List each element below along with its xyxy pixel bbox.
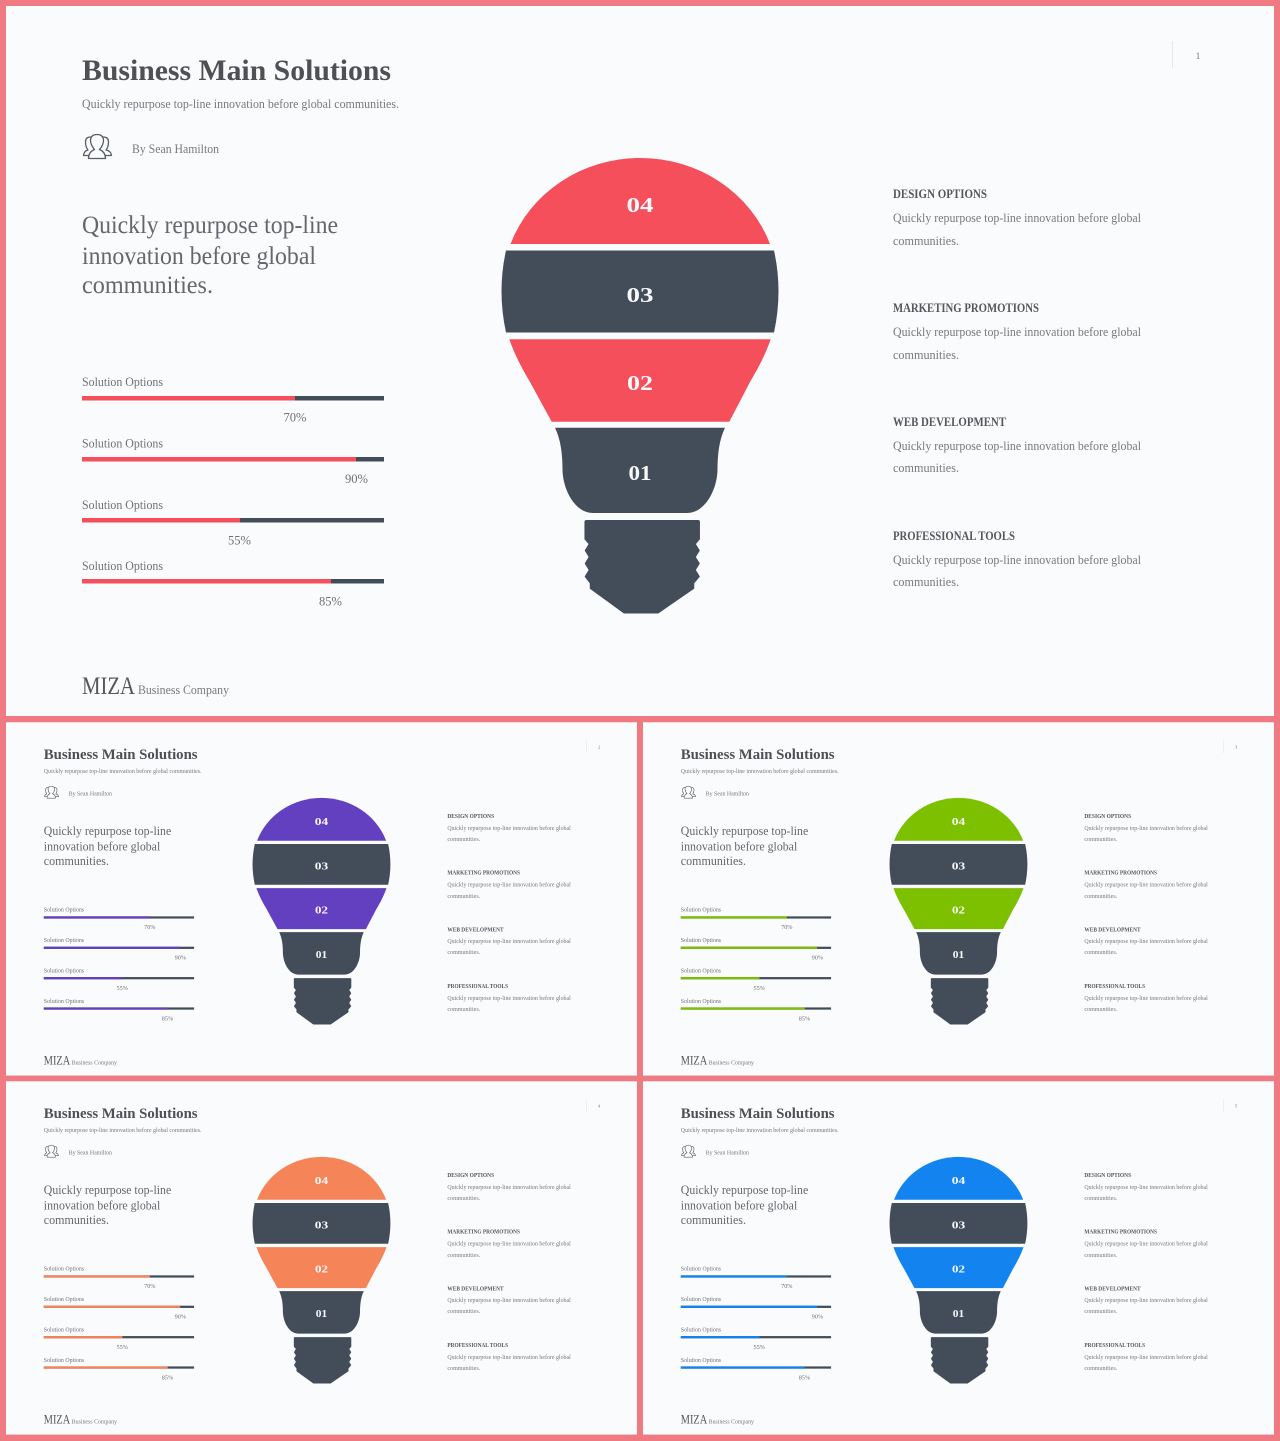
solutions list: Quickly repurpose top-line innovation before global (1084, 995, 1208, 1002)
solutions list: Quickly repurpose top-line innovation before global (447, 1297, 571, 1304)
solutions list: communities. (1084, 1308, 1118, 1315)
solutions list: Quickly repurpose top-line innovation before global (893, 324, 1141, 339)
light bulb: 04 (315, 817, 329, 828)
subtitle: Quickly repurpose top-line innovation before global communities. (44, 1127, 202, 1134)
title: Business Main Solutions (681, 747, 835, 763)
light bulb: 01 (316, 950, 327, 961)
progress bars: 85% (799, 1016, 811, 1023)
solutions list: communities. (1084, 893, 1118, 900)
progress bars: 70% (144, 924, 156, 931)
progress bars: 70% (781, 1283, 793, 1290)
author: By Sean Hamilton (69, 1149, 113, 1156)
footer brand (681, 1054, 755, 1068)
solutions list: PROFESSIONAL TOOLS (893, 529, 1015, 543)
light bulb: 02 (952, 905, 965, 916)
solutions list: communities. (447, 949, 481, 956)
solutions list: communities. (893, 233, 959, 248)
author: By Sean Hamilton (706, 1149, 750, 1156)
progress bars (82, 374, 384, 608)
progress bars (44, 1265, 194, 1382)
solutions list: communities. (1084, 836, 1118, 843)
solutions list: DESIGN OPTIONS (447, 813, 495, 820)
solutions list (893, 187, 1141, 589)
progress bars (44, 906, 194, 1023)
light bulb: 03 (952, 1221, 965, 1232)
progress bars: Solution Options (82, 497, 163, 512)
footer brand: MIZA (681, 1054, 707, 1068)
solutions list: communities. (893, 347, 959, 362)
solutions list: WEB DEVELOPMENT (447, 926, 504, 933)
panel: red slide (6, 6, 1274, 716)
light bulb (502, 158, 778, 613)
footer brand: MIZA (681, 1413, 707, 1427)
light bulb: 03 (315, 1221, 328, 1232)
page number: 5 (1235, 1104, 1238, 1109)
progress bars: Solution Options (44, 906, 85, 913)
footer brand: Business Company (72, 1060, 118, 1067)
solutions list (447, 813, 571, 1013)
lead text: innovation before global (44, 840, 161, 854)
lead text (44, 824, 172, 868)
solutions list: Quickly repurpose top-line innovation before global (1084, 1297, 1208, 1304)
solutions list: MARKETING PROMOTIONS (1084, 1229, 1157, 1236)
solutions list (1084, 1172, 1208, 1372)
progress bars: Solution Options (44, 998, 85, 1005)
progress bars: Solution Options (44, 1296, 85, 1303)
author: By Sean Hamilton (706, 790, 750, 797)
page number: 1 (1196, 51, 1200, 61)
solutions list: WEB DEVELOPMENT (1084, 926, 1141, 933)
light bulb: 04 (952, 1176, 966, 1187)
progress bars: 90% (345, 471, 368, 486)
progress bars: 70% (781, 924, 793, 931)
progress bars: 85% (162, 1016, 174, 1023)
solutions list: Quickly repurpose top-line innovation before global (893, 552, 1141, 567)
lead text: communities. (44, 854, 109, 868)
solutions list: Quickly repurpose top-line innovation before global (447, 1184, 571, 1191)
footer brand: MIZA (44, 1413, 70, 1427)
progress bars: 55% (753, 985, 765, 992)
solutions list: Quickly repurpose top-line innovation before global (893, 210, 1141, 225)
lead text: communities. (82, 272, 213, 299)
page number (586, 740, 600, 753)
lead text: Quickly repurpose top-line (44, 824, 172, 838)
icon: people (45, 1145, 58, 1157)
progress bars: 85% (319, 594, 342, 608)
light bulb (253, 798, 390, 1024)
light bulb: 02 (952, 1264, 965, 1275)
light bulb: 04 (626, 193, 654, 217)
progress bars: Solution Options (681, 998, 722, 1005)
solutions list: PROFESSIONAL TOOLS (447, 1342, 509, 1349)
solutions list: Quickly repurpose top-line innovation before global (1084, 938, 1208, 945)
footer brand (44, 1413, 118, 1427)
progress bars: Solution Options (44, 1265, 85, 1272)
solutions list: communities. (893, 574, 959, 589)
light bulb (890, 798, 1027, 1024)
light bulb: 01 (628, 461, 652, 485)
progress bars: 55% (116, 1344, 128, 1351)
solutions list: communities. (447, 1308, 481, 1315)
progress bars: 70% (284, 410, 307, 424)
solutions list: PROFESSIONAL TOOLS (1084, 983, 1146, 990)
solutions list: communities. (1084, 949, 1118, 956)
solutions list: Quickly repurpose top-line innovation before global (893, 438, 1141, 453)
solutions list: Quickly repurpose top-line innovation before global (447, 881, 571, 888)
light bulb: 01 (953, 1309, 964, 1320)
panel: green slide (643, 722, 1274, 1076)
page number: 4 (598, 1104, 601, 1109)
panel: orange slide (6, 1081, 637, 1435)
solutions list: communities. (447, 836, 481, 843)
solutions list: Quickly repurpose top-line innovation before global (1084, 825, 1208, 832)
solutions list: Quickly repurpose top-line innovation before global (447, 1354, 571, 1361)
light bulb: 04 (315, 1176, 329, 1187)
solutions list: DESIGN OPTIONS (1084, 1172, 1132, 1179)
light bulb (890, 1157, 1027, 1383)
progress bars: Solution Options (82, 374, 163, 389)
progress bars: Solution Options (681, 906, 722, 913)
lead text: Quickly repurpose top-line (82, 212, 338, 239)
progress bars: 90% (812, 955, 824, 962)
solutions list: Quickly repurpose top-line innovation before global (447, 995, 571, 1002)
solutions list: Quickly repurpose top-line innovation before global (1084, 1240, 1208, 1247)
icon: people (45, 786, 58, 798)
solutions list: communities. (1084, 1006, 1118, 1013)
progress bars: 90% (812, 1314, 824, 1321)
light bulb: 02 (627, 371, 653, 395)
lead text: Quickly repurpose top-line (44, 1183, 172, 1197)
solutions list: communities. (447, 1195, 481, 1202)
lead text: Quickly repurpose top-line (681, 824, 809, 838)
footer brand: MIZA (44, 1054, 70, 1068)
solutions list: MARKETING PROMOTIONS (447, 1229, 520, 1236)
solutions list: Quickly repurpose top-line innovation before global (1084, 881, 1208, 888)
progress bars: 85% (162, 1375, 174, 1382)
lead text: communities. (44, 1213, 109, 1227)
lead text: communities. (681, 1213, 746, 1227)
solutions list: WEB DEVELOPMENT (1084, 1285, 1141, 1292)
progress bars: Solution Options (82, 436, 163, 450)
author: By Sean Hamilton (69, 790, 113, 797)
solutions list: MARKETING PROMOTIONS (1084, 870, 1157, 877)
lead text (82, 212, 338, 299)
page number (1223, 1099, 1238, 1112)
solutions list: Quickly repurpose top-line innovation before global (1084, 1354, 1208, 1361)
solutions list: PROFESSIONAL TOOLS (1084, 1342, 1146, 1349)
progress bars: Solution Options (681, 937, 722, 944)
solutions list: communities. (447, 1252, 481, 1259)
light bulb: 03 (315, 862, 328, 873)
footer brand: Business Company (138, 682, 229, 697)
subtitle: Quickly repurpose top-line innovation before global communities. (82, 96, 399, 111)
solutions list: Quickly repurpose top-line innovation before global (447, 1240, 571, 1247)
progress bars: Solution Options (44, 1357, 85, 1364)
solutions list (1084, 813, 1208, 1013)
solutions list: communities. (893, 460, 959, 475)
solutions list: Quickly repurpose top-line innovation before global (1084, 1184, 1208, 1191)
solutions list: DESIGN OPTIONS (447, 1172, 495, 1179)
solutions list: WEB DEVELOPMENT (447, 1285, 504, 1292)
solutions list: WEB DEVELOPMENT (893, 415, 1007, 429)
lead text: innovation before global (82, 243, 316, 270)
title: Business Main Solutions (681, 1106, 835, 1122)
solutions list: communities. (1084, 1252, 1118, 1259)
progress bars: Solution Options (44, 937, 85, 944)
page number: 3 (1235, 745, 1238, 750)
solutions list: Quickly repurpose top-line innovation before global (447, 938, 571, 945)
lead text (681, 824, 809, 868)
progress bars: 55% (116, 985, 128, 992)
progress bars: Solution Options (44, 968, 85, 975)
solutions list: communities. (1084, 1365, 1118, 1372)
solutions list: communities. (447, 893, 481, 900)
light bulb (253, 1157, 390, 1383)
lead text: communities. (681, 854, 746, 868)
progress bars: Solution Options (681, 1296, 722, 1303)
progress bars (681, 906, 831, 1023)
progress bars: Solution Options (82, 558, 163, 573)
lead text: innovation before global (44, 1199, 161, 1213)
progress bars (681, 1265, 831, 1382)
light bulb: 01 (953, 950, 964, 961)
progress bars: Solution Options (681, 1265, 722, 1272)
solutions list: DESIGN OPTIONS (893, 187, 987, 201)
solutions list: DESIGN OPTIONS (1084, 813, 1132, 820)
page number: 2 (598, 745, 600, 750)
solutions list: communities. (1084, 1195, 1118, 1202)
subtitle: Quickly repurpose top-line innovation before global communities. (681, 768, 839, 775)
progress bars: 85% (799, 1375, 811, 1382)
panel: purple slide (6, 722, 637, 1076)
title: Business Main Solutions (44, 747, 198, 763)
page number (1223, 740, 1238, 753)
progress bars: Solution Options (681, 968, 722, 975)
lead text (681, 1183, 809, 1227)
footer brand: MIZA (82, 673, 135, 700)
light bulb: 04 (952, 817, 966, 828)
footer brand: Business Company (709, 1060, 755, 1067)
footer brand (44, 1054, 118, 1068)
title: Business Main Solutions (44, 1106, 198, 1122)
footer brand: Business Company (709, 1419, 755, 1426)
light bulb: 01 (316, 1309, 327, 1320)
subtitle: Quickly repurpose top-line innovation before global communities. (44, 768, 202, 775)
progress bars: 90% (175, 1314, 187, 1321)
lead text: innovation before global (681, 840, 798, 854)
solutions list: MARKETING PROMOTIONS (447, 870, 520, 877)
progress bars: 90% (175, 955, 187, 962)
progress bars: 55% (228, 532, 251, 548)
progress bars: 70% (144, 1283, 156, 1290)
solutions list: Quickly repurpose top-line innovation before global (447, 825, 571, 832)
footer brand: Business Company (72, 1419, 118, 1426)
light bulb: 02 (315, 1264, 328, 1275)
icon: people (84, 134, 112, 158)
progress bars: 55% (753, 1344, 765, 1351)
lead text: innovation before global (681, 1199, 798, 1213)
progress bars: Solution Options (681, 1327, 722, 1334)
solutions list: communities. (447, 1365, 481, 1372)
subtitle: Quickly repurpose top-line innovation before global communities. (681, 1127, 839, 1134)
light bulb: 03 (626, 283, 654, 307)
solutions list (447, 1172, 571, 1372)
icon: people (682, 786, 695, 798)
page number (1172, 41, 1200, 68)
footer brand (82, 673, 229, 700)
page number (586, 1099, 601, 1112)
panel: blue slide (643, 1081, 1274, 1435)
light bulb: 03 (952, 862, 965, 873)
progress bars: Solution Options (44, 1327, 85, 1334)
solutions list: MARKETING PROMOTIONS (893, 301, 1039, 315)
lead text: Quickly repurpose top-line (681, 1183, 809, 1197)
title: Business Main Solutions (82, 54, 391, 87)
icon: people (682, 1145, 695, 1157)
solutions list: PROFESSIONAL TOOLS (447, 983, 509, 990)
footer brand (681, 1413, 755, 1427)
light bulb: 02 (315, 905, 328, 916)
lead text (44, 1183, 172, 1227)
author: By Sean Hamilton (132, 141, 219, 156)
solutions list: communities. (447, 1006, 481, 1013)
progress bars: Solution Options (681, 1357, 722, 1364)
